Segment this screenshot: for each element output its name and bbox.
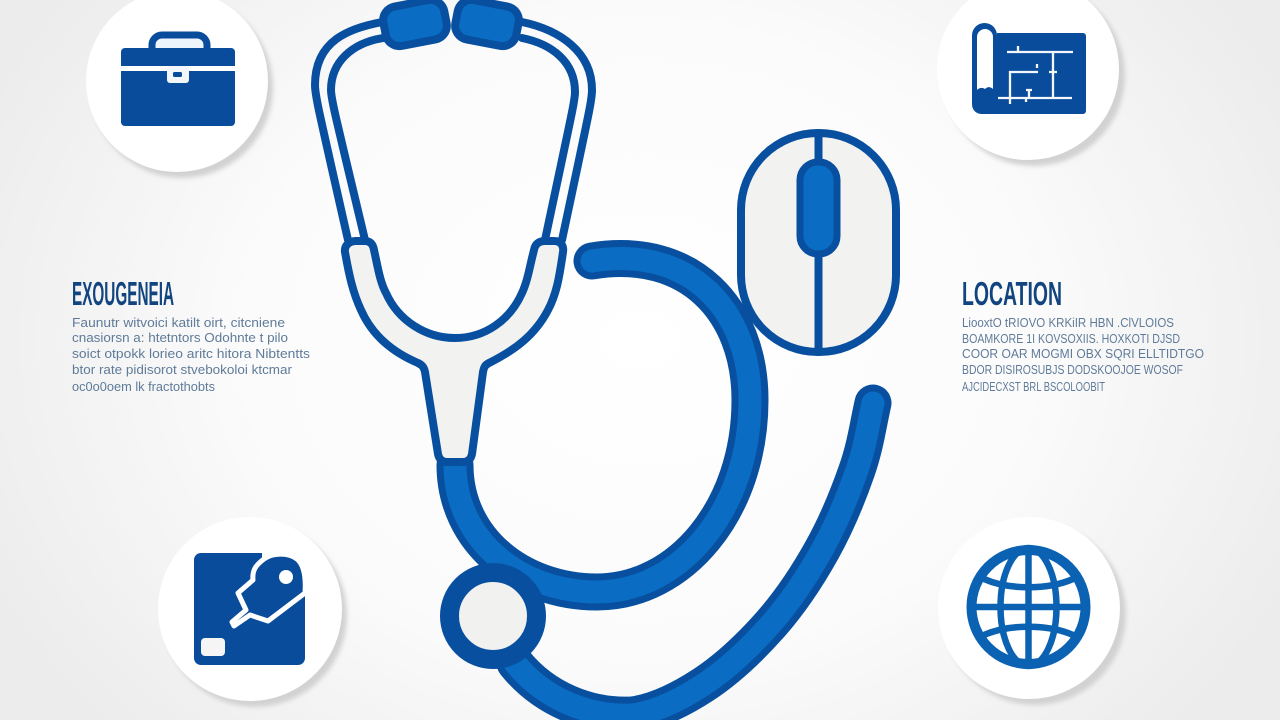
text block: location — [962, 275, 1204, 394]
body copy: location: BDOR DISIROSUBJS DODSKOOJOE WOSOF — [962, 363, 1183, 377]
right earpiece — [453, 0, 521, 49]
text block: left: EXOUGENEIA — [72, 275, 174, 312]
body copy: left — [72, 316, 310, 394]
body copy: location: AJCIDECXST BRL BSCOLOOBIT — [962, 380, 1105, 394]
icon badge: briefcase — [86, 0, 273, 178]
main tube — [455, 259, 750, 592]
right ear tube — [522, 22, 592, 240]
body copy: location: BOAMKORE 1I KOVSOXIIS. HOXKOTI DJSD — [962, 332, 1180, 346]
body copy: left: soict otpokk lorieo aritc hitora Nibtentts — [72, 347, 310, 361]
chest piece — [450, 572, 536, 660]
body copy: location — [962, 316, 1204, 394]
icon badge: globe — [938, 517, 1126, 705]
stethoscope — [315, 0, 873, 715]
left earpiece — [381, 0, 449, 49]
body copy: left: oc0o0oem lk fractothobts — [72, 380, 215, 394]
body copy: left: Faunutr witvoici katilt oirt, citcniene — [72, 316, 285, 330]
body copy: location: COOR OAR MOGMI OBX SQRI ELLTIDTGO — [962, 347, 1204, 361]
body copy: left: cnasiorsn a: htetntors Odohnte t pilo — [72, 331, 288, 345]
Y-shaped yoke — [345, 241, 563, 462]
icon badge: blueprint — [937, 0, 1125, 166]
icon badge: key tag — [158, 517, 347, 707]
body copy: location: LiooxtO tRIOVO KRKiIR HBN .ClVLOIOS — [962, 316, 1174, 330]
mouse — [741, 133, 896, 352]
text block: left — [72, 275, 310, 394]
lower tube — [515, 403, 873, 715]
left ear tube — [315, 22, 383, 240]
body copy: left: btor rate pidisorot stvebokoloi ktcmar — [72, 363, 292, 377]
heading: location: LOCATION — [962, 275, 1062, 312]
